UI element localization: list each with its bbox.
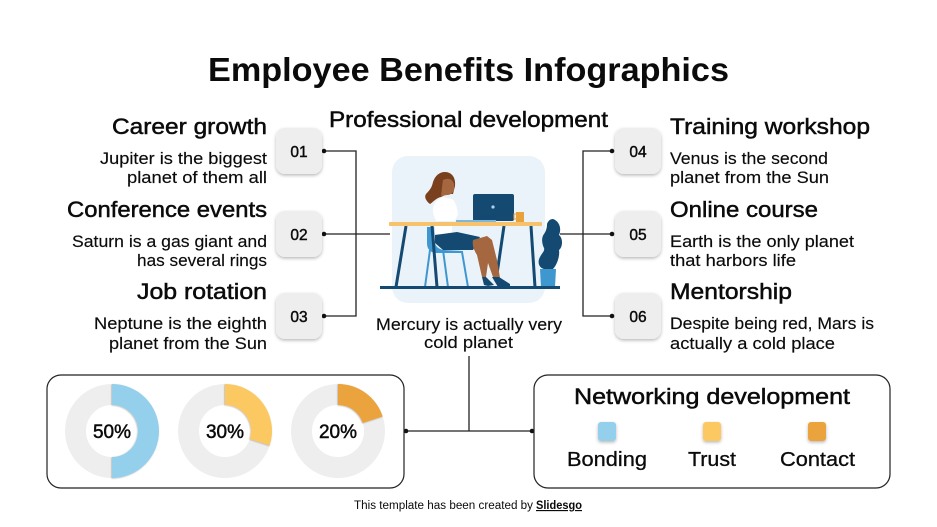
item 06: mentorship: Despite being red, Mars is xyxy=(670,315,874,333)
item 01: career growth: Jupiter is the biggest xyxy=(100,150,267,168)
heading: professional development: Professional development xyxy=(329,107,609,132)
donut chart: 20% xyxy=(302,384,383,468)
item 01: career growth: Career growth xyxy=(112,114,267,139)
donut chart: 50%: 50% xyxy=(93,421,131,443)
title: Employee Benefits Infographics xyxy=(208,52,729,89)
legend: contact: Contact xyxy=(780,449,855,471)
number badge 03: 03 xyxy=(290,309,308,326)
item 03: job rotation: Neptune is the eighth xyxy=(94,315,267,333)
legend: trust xyxy=(688,422,736,471)
text: mercury description xyxy=(376,316,563,352)
number badge 06: 06 xyxy=(629,309,647,326)
heading: networking development: Networking development xyxy=(574,384,851,409)
text: mercury description: Mercury is actually very xyxy=(376,316,563,334)
number badge 03 xyxy=(276,293,322,339)
item 05: online course: Online course xyxy=(670,197,818,222)
number badge 02: 02 xyxy=(290,227,308,244)
illustration: woman working at desk xyxy=(380,156,562,303)
donut chart: 50% xyxy=(76,384,159,478)
footer credit: This template has been created by xyxy=(354,500,533,512)
number badge 01 xyxy=(276,128,322,174)
item 02: conference events xyxy=(67,197,267,270)
number badge 05 xyxy=(615,211,661,257)
panel: networking development xyxy=(534,375,890,488)
legend: contact xyxy=(780,422,855,471)
item 04: training workshop xyxy=(670,114,870,187)
item 05: online course: that harbors life xyxy=(670,252,796,270)
footer credit: Slidesgo xyxy=(536,500,582,512)
item 05: online course: Earth is the only planet xyxy=(670,233,854,251)
item 06: mentorship xyxy=(670,279,874,353)
legend: trust: Trust xyxy=(688,449,736,471)
connector lines xyxy=(322,149,614,433)
item 04: training workshop: Venus is the second xyxy=(670,150,828,168)
number badge 04: 04 xyxy=(629,144,647,161)
item 01: career growth: planet of them all xyxy=(127,169,267,187)
item 06: mentorship: actually a cold place xyxy=(670,335,835,353)
item 02: conference events: Saturn is a gas giant and xyxy=(72,233,267,251)
text: mercury description: cold planet xyxy=(424,334,513,352)
item 04: training workshop: planet from the Sun xyxy=(670,169,829,187)
number badge 06 xyxy=(615,293,661,339)
item 05: online course xyxy=(670,197,854,270)
item 04: training workshop: Training workshop xyxy=(670,114,870,139)
donut chart: 20%: 20% xyxy=(319,421,357,443)
item 03: job rotation: Job rotation xyxy=(137,279,267,304)
donut chart: 30%: 30% xyxy=(206,421,244,443)
legend: bonding: Bonding xyxy=(567,449,647,471)
item 03: job rotation: planet from the Sun xyxy=(109,335,267,353)
item 02: conference events: Conference events xyxy=(67,197,267,222)
number badge 04 xyxy=(615,128,661,174)
number badge 02 xyxy=(276,211,322,257)
item 06: mentorship: Mentorship xyxy=(670,279,792,304)
legend: bonding xyxy=(567,422,647,471)
number badge 01: 01 xyxy=(290,144,308,161)
item 01: career growth xyxy=(100,114,267,187)
item 02: conference events: has several rings xyxy=(137,252,267,270)
donut chart: 30% xyxy=(188,384,272,468)
number badge 05: 05 xyxy=(629,227,647,244)
panel: percent donuts xyxy=(47,375,404,488)
item 03: job rotation xyxy=(94,279,267,353)
